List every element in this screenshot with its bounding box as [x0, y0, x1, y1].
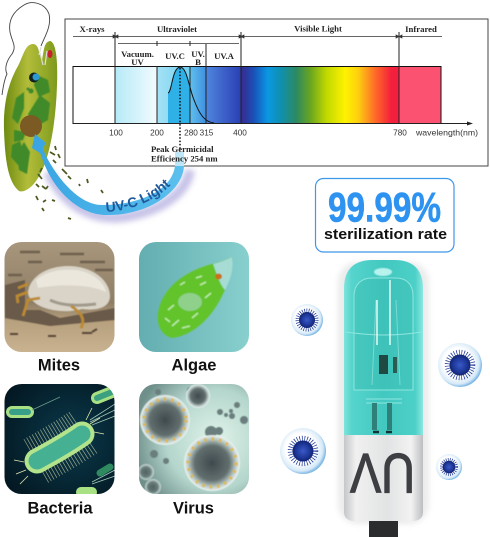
gullet — [39, 47, 47, 65]
99.99% figure: 99.99% — [328, 184, 441, 230]
spectrum chart — [65, 19, 488, 166]
euglena illustration — [2, 2, 197, 226]
band labels: UV. — [191, 49, 205, 59]
virus photo — [138, 384, 249, 495]
peak germicidal note — [151, 68, 218, 166]
germicidal curve — [168, 67, 214, 123]
wavelength ticks: 315 — [200, 128, 214, 138]
wavelength ticks: 100 — [109, 128, 123, 138]
peak germicidal note: Peak Germicidal — [151, 144, 214, 154]
Virus label: Virus — [173, 500, 214, 518]
spectrum bar — [73, 32, 473, 126]
Bacteria label: Bacteria — [27, 500, 93, 518]
wavelength ticks: wavelength(nm) — [415, 128, 478, 138]
blue vacuole — [29, 72, 40, 82]
cell body — [4, 41, 57, 191]
brown nucleus — [20, 115, 42, 137]
debris — [36, 146, 103, 219]
icon: virus bubble 4 — [436, 454, 462, 480]
bacteria photo — [4, 384, 115, 494]
band labels: Ultraviolet — [157, 24, 197, 34]
band labels: UV.A — [214, 51, 235, 61]
panel: virus — [138, 384, 249, 518]
filament — [372, 355, 397, 432]
wavelength ticks: 400 — [233, 128, 247, 138]
sterilization rate text: sterilization rate — [324, 227, 447, 243]
teal glass tube — [344, 260, 423, 436]
flagellum — [2, 3, 50, 95]
band labels: X-rays — [79, 24, 105, 34]
wavelength ticks: 780 — [393, 128, 407, 138]
band labels — [79, 24, 437, 67]
band labels: Infrared — [405, 24, 437, 34]
band labels: UV.C — [165, 51, 185, 61]
cable — [369, 521, 398, 537]
peak germicidal note: Efficiency 254 nm — [151, 154, 218, 164]
wavelength ticks: 200 — [150, 128, 164, 138]
band labels: B — [195, 57, 201, 67]
lamp shadow — [338, 262, 429, 524]
range arrows — [73, 35, 442, 44]
chart frame — [65, 19, 488, 166]
icon: virus bubble 1 — [291, 304, 323, 336]
band labels: UV — [131, 57, 144, 67]
chloroplasts — [11, 75, 50, 174]
panel: algae — [139, 242, 249, 374]
UV-C light arrow — [32, 134, 190, 218]
mite photo — [4, 242, 115, 352]
wavelength ticks — [109, 128, 478, 138]
wavelength ticks: 280 — [184, 128, 198, 138]
red eyespot — [48, 50, 52, 58]
UV mark: UV — [349, 442, 415, 505]
callout: sterilization rate — [316, 178, 454, 252]
band labels: Vacuum. — [121, 49, 154, 59]
panel: mites — [4, 242, 115, 374]
UV lamp — [338, 260, 429, 537]
UV-C Light label: UV-C Light — [106, 179, 170, 212]
Mites label: Mites — [38, 356, 80, 374]
icon: virus bubble 3 — [280, 428, 326, 474]
band labels: Visible Light — [294, 24, 342, 34]
Algae label: Algae — [172, 356, 216, 374]
inner bulb — [345, 268, 422, 403]
algae photo — [139, 242, 249, 352]
icon: virus bubble 2 — [438, 343, 482, 387]
silver base — [344, 435, 423, 521]
panel: bacteria — [4, 384, 115, 518]
